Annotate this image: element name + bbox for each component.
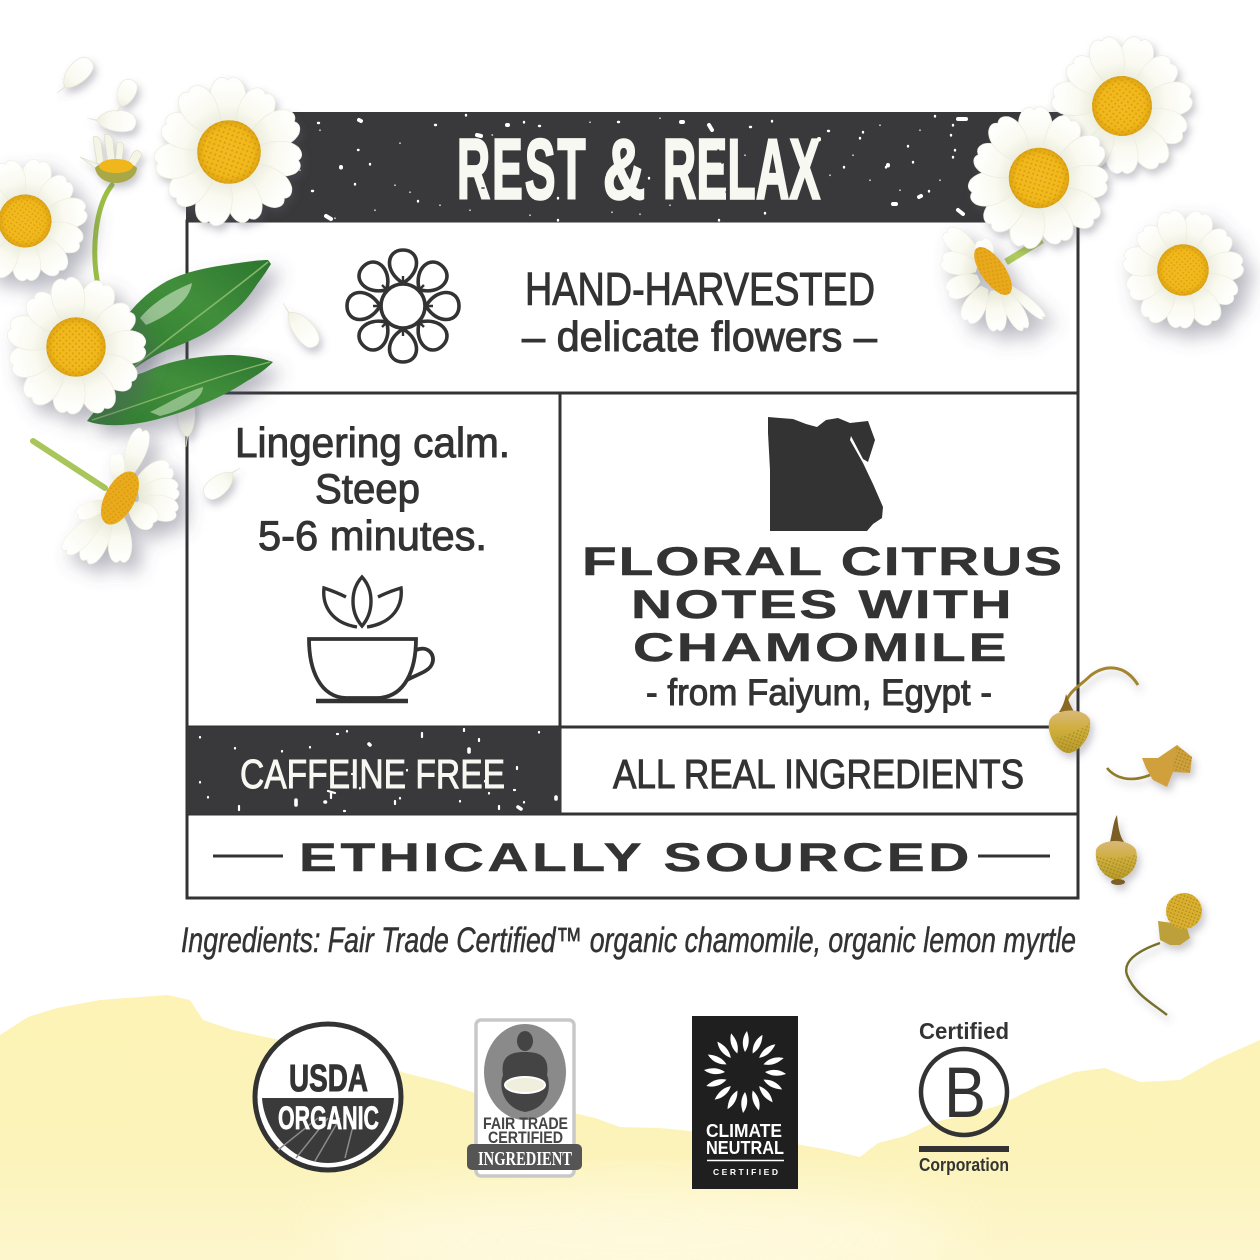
text: caffeine free: CAFFEINE FREE bbox=[240, 751, 505, 797]
banner title: REST bbox=[457, 123, 586, 217]
text: floral citrus: FLORAL CITRUS bbox=[582, 540, 1062, 584]
stem: side flower bbox=[33, 441, 105, 488]
stem: small right bbox=[1006, 240, 1042, 262]
text: B: B bbox=[944, 1054, 986, 1133]
flower: side view right bbox=[939, 223, 1047, 333]
text: from Faiyum, Egypt: - from Faiyum, Egypt - bbox=[646, 672, 992, 713]
text: corporation: Corporation bbox=[919, 1155, 1009, 1175]
flower: top of banner bbox=[147, 70, 312, 234]
text: fair trade certified: FAIR TRADE bbox=[483, 1114, 568, 1133]
badge: climate neutral bbox=[692, 1016, 798, 1189]
flower: side view bbox=[58, 426, 180, 567]
photo: dried chamomile bbox=[1049, 668, 1202, 1015]
dried flower 4 bbox=[1126, 893, 1202, 1015]
main table frame bbox=[187, 221, 1078, 898]
flower: on banner right bbox=[958, 97, 1121, 260]
dried flower 2 bbox=[1107, 745, 1192, 787]
text: chamomile: CHAMOMILE bbox=[633, 626, 1006, 670]
chamomile bud bbox=[80, 134, 142, 183]
text: lingering calm: Lingering calm. bbox=[235, 419, 510, 466]
dried flower 1 bbox=[1049, 668, 1138, 753]
icon: Egypt map bbox=[768, 417, 883, 531]
text: hand-harvested: HAND-HARVESTED bbox=[525, 263, 875, 315]
icon: tea cup with leaves bbox=[309, 577, 433, 701]
text: all real ingredients: ALL REAL INGREDIENTS bbox=[613, 751, 1024, 797]
caffeine speckle texture bbox=[200, 729, 556, 811]
panel: steep instructions bbox=[235, 419, 510, 701]
badge: USDA organic bbox=[255, 1024, 401, 1170]
flower: far right bbox=[1108, 195, 1258, 345]
text: ingredient: INGREDIENT bbox=[478, 1148, 572, 1170]
banner title: & bbox=[603, 123, 645, 217]
photo: right chamomile cluster bbox=[939, 21, 1258, 345]
panel: flavor notes bbox=[582, 417, 1062, 713]
text: USDA: USDA bbox=[289, 1058, 368, 1100]
photo: left chamomile cluster bbox=[0, 53, 324, 567]
text: delicate flowers: – delicate flowers – bbox=[522, 313, 878, 360]
leaf: lower bbox=[87, 355, 273, 425]
banner title: RELAX bbox=[663, 123, 820, 217]
text: ORGANIC: ORGANIC bbox=[278, 1100, 379, 1136]
icon: flower outline bbox=[347, 250, 459, 362]
badge: climate neutral: NEUTRAL bbox=[706, 1138, 784, 1158]
icon: sun rays bbox=[704, 1031, 786, 1113]
badge: fair trade bbox=[467, 1020, 582, 1176]
banner: Rest & Relax bbox=[186, 112, 1078, 222]
text: steep: Steep bbox=[315, 465, 420, 512]
title speckles bbox=[482, 150, 773, 192]
text: notes with: NOTES WITH bbox=[631, 583, 1012, 627]
text: certified: Certified bbox=[919, 1018, 1009, 1044]
text: climate neutral: CLIMATE bbox=[706, 1121, 782, 1141]
badge: fair trade: CERTIFIED bbox=[488, 1128, 563, 1147]
loose petals bbox=[50, 53, 324, 504]
flower: cropped left bbox=[0, 148, 99, 295]
stem: bud bbox=[95, 185, 112, 290]
badge: certified B corporation bbox=[919, 1018, 1009, 1175]
banner speckle texture bbox=[205, 115, 966, 220]
text: minutes: 5-6 minutes. bbox=[258, 512, 487, 559]
flower: top right bbox=[1037, 21, 1207, 191]
cell: caffeine free bbox=[187, 727, 561, 814]
row: hand-harvested bbox=[347, 250, 878, 362]
yellow watercolor band bbox=[0, 990, 1260, 1260]
leaf: upper bbox=[124, 260, 271, 374]
flower: large left bbox=[0, 256, 167, 438]
banner title bbox=[457, 123, 820, 217]
dried flower 3 bbox=[1096, 815, 1137, 885]
text: ethically sourced: ETHICALLY SOURCED bbox=[299, 836, 969, 880]
text: certified: CERTIFIED bbox=[713, 1167, 778, 1177]
